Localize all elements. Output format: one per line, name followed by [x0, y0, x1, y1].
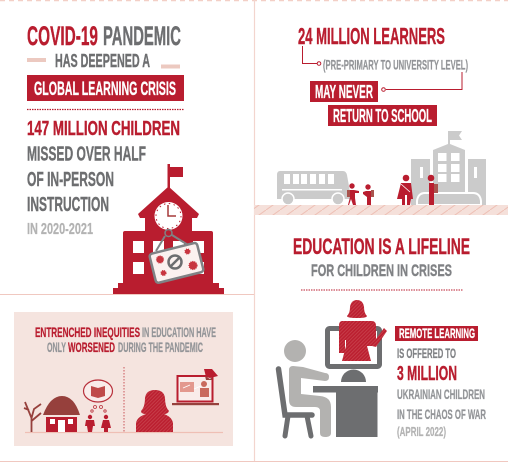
- inequities text: IN EDUCATION HAVE: [142, 324, 216, 340]
- title: PANDEMIC: [103, 21, 181, 51]
- banner: may never: MAY NEVER: [315, 81, 373, 102]
- banner: global learning crisis: [27, 75, 184, 101]
- panel: covid learning crisis: [27, 21, 224, 294]
- statistic text: INSTRUCTION: [27, 193, 109, 216]
- icon: school bus: [277, 171, 350, 205]
- remote learning text: IS OFFERED TO: [397, 346, 456, 361]
- icon: children thinking of book: [84, 380, 112, 432]
- remote learning text: [395, 326, 486, 439]
- panel: 24 million learners: [254, 23, 508, 215]
- banner: may never: [310, 81, 378, 102]
- icon: laptop with online teacher: [172, 369, 219, 405]
- icon: students: [347, 175, 438, 205]
- banner: return to school: [328, 105, 437, 126]
- title: COVID-19: [27, 21, 98, 51]
- icon: woman silhouette: [136, 390, 173, 432]
- ground band: [254, 205, 508, 215]
- inequities text: ONLY: [47, 339, 66, 355]
- banner: global learning crisis: GLOBAL LEARNING CRISIS: [34, 78, 176, 100]
- icon: bare tree: [24, 402, 41, 432]
- statistic text: OF IN-PERSON: [27, 168, 114, 191]
- icon: hut: [43, 396, 80, 432]
- remote learning text: (APRIL 2022): [397, 425, 446, 439]
- icon: student at desk: [278, 340, 378, 437]
- remote learning text: 3 MILLION: [397, 362, 457, 385]
- panel: education is a lifeline: [278, 234, 486, 439]
- panel: entrenched inequities: [14, 312, 233, 446]
- statistic text: IN 2020-2021: [27, 221, 93, 238]
- inequities text: DURING THE PANDEMIC: [118, 339, 203, 355]
- icon: closed school: [113, 164, 224, 294]
- icon: monitor with teacher: [328, 300, 387, 382]
- icon: school building: [411, 131, 486, 205]
- inequities text: [35, 324, 216, 355]
- statistic text: MISSED OVER HALF: [27, 142, 146, 166]
- inequities text: ENTRENCHED INEQUITIES: [35, 324, 140, 340]
- subtitle: HAS DEEPENED A: [55, 50, 150, 71]
- inequities text: WORSENED: [68, 339, 115, 355]
- statistic text: 147 MILLION CHILDREN: [27, 117, 180, 140]
- statistic text: [27, 117, 180, 238]
